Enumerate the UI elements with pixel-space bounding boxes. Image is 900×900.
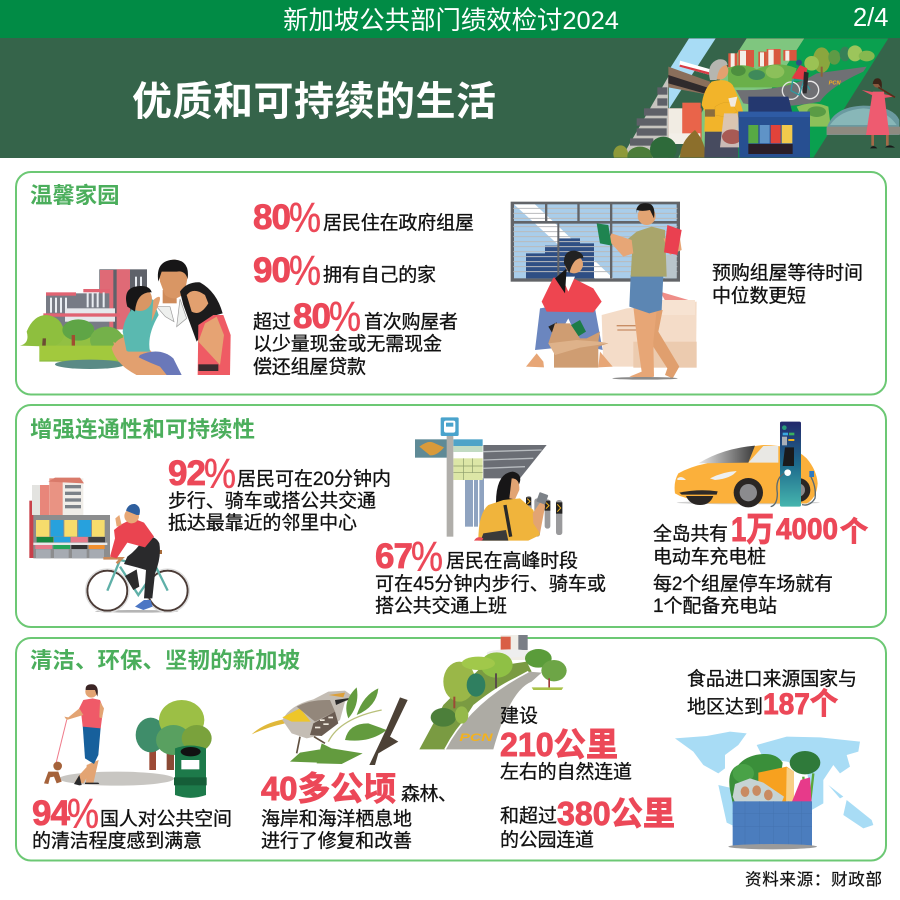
stat: 92% xyxy=(168,450,391,534)
stat: first-time buyers xyxy=(253,293,458,378)
stat: 90% own home: 拥有自己的家 xyxy=(323,264,436,286)
man's legs xyxy=(650,310,679,378)
illustration: world map and groceries xyxy=(675,732,873,849)
heading: 清洁、环保、坚韧的新加坡 xyxy=(30,648,300,673)
stat: 92%: % xyxy=(204,450,236,497)
stat: 210 km nature ways and 380 km park connectors: 380公里 xyxy=(557,795,675,832)
illustration: cyclist xyxy=(29,478,189,613)
stat: 14,000 charging points: 个 xyxy=(840,516,868,547)
stat: 92%: 抵达最靠近的邻里中心 xyxy=(168,512,357,534)
stat: 40 hectares: 海岸和海洋栖息地 xyxy=(261,808,412,830)
stat: 67%: 搭公共交通上班 xyxy=(375,595,507,617)
stat: 94%: % xyxy=(67,790,99,837)
text: waiting time: 预购组屋等待时间 xyxy=(712,262,863,284)
stat: 90% own home: 90 xyxy=(253,251,291,290)
stat: first-time buyers: 首次购屋者 xyxy=(364,311,458,333)
stat: 40 hectares: 森林、 xyxy=(401,783,457,805)
stat: 210 km nature ways and 380 km park connectors: 建设 xyxy=(500,705,538,727)
stat: 90% own home xyxy=(253,247,436,294)
stat: 67%: 可在45分钟内步行、骑车或 xyxy=(375,573,606,595)
illustration: bus stop xyxy=(415,417,562,541)
banner title: 优质和可持续的生活 xyxy=(132,80,496,124)
stat: 92%: 92 xyxy=(168,454,206,493)
banner illustration xyxy=(613,38,900,165)
stat: 80% live in HDB: 80 xyxy=(253,198,291,237)
stat: 94% xyxy=(32,790,232,852)
stat: 210 km nature ways and 380 km park connectors: 左右的自然连道 xyxy=(500,761,632,783)
report title: 新加坡公共部门绩效检讨2024 xyxy=(283,7,619,35)
stat: 14,000 charging points: 1个配备充电站 xyxy=(653,595,777,617)
heading: 温馨家园 xyxy=(30,182,120,208)
stat: 80% live in HDB: % xyxy=(289,194,321,241)
illustration: couple moving in xyxy=(511,202,697,380)
stat: 67%: % xyxy=(411,533,443,580)
heading: 增强连通性和可持续性 xyxy=(30,417,255,442)
stat: 14,000 charging points: 每2个组屋停车场就有 xyxy=(653,573,833,595)
stat: 94%: 国人对公共空间 xyxy=(100,808,232,830)
banner illustration: PCN xyxy=(829,80,842,86)
stat: 14,000 charging points xyxy=(653,511,868,617)
stat: first-time buyers: 超过 xyxy=(253,311,291,333)
stat: first-time buyers: 以少量现金或无需现金 xyxy=(253,333,442,355)
stat: 67%: 67 xyxy=(375,537,413,576)
icon: family and flats xyxy=(20,260,231,375)
stat: first-time buyers: 80 xyxy=(293,297,331,336)
stat: 90% own home: % xyxy=(289,247,321,294)
illustration: bird on branch xyxy=(252,687,408,765)
stat: 14,000 charging points: 全岛共有 xyxy=(653,523,728,545)
stat: 210 km nature ways and 380 km park connectors: 210公里 xyxy=(500,726,618,763)
stat: 67% xyxy=(375,533,606,617)
stat: 210 km nature ways and 380 km park connectors xyxy=(500,705,675,851)
illustration: EV and charger xyxy=(675,422,820,507)
stat: 210 km nature ways and 380 km park connectors: 和超过 xyxy=(500,805,557,827)
stat: first-time buyers: 偿还组屋贷款 xyxy=(253,356,366,378)
stat: 92%: 居民可在20分钟内 xyxy=(237,468,391,490)
banner xyxy=(0,38,900,165)
stat: food import sources: 地区达到 xyxy=(687,696,763,718)
stat: 14,000 charging points: 4000 xyxy=(776,513,838,546)
text: waiting time xyxy=(712,262,863,307)
stat: 67%: 居民在高峰时段 xyxy=(446,550,578,572)
illustration: park connector: PCN xyxy=(459,732,494,744)
page number: 2/4 xyxy=(853,4,888,32)
source note: 资料来源：财政部 xyxy=(745,870,882,889)
stat: 14,000 charging points: 1万 xyxy=(731,511,774,549)
stat: food import sources: 食品进口来源国家与 xyxy=(687,668,857,690)
stat: 210 km nature ways and 380 km park connectors: 的公园连道 xyxy=(500,829,594,851)
stat: 80% live in HDB xyxy=(253,194,474,241)
stat: first-time buyers: % xyxy=(329,293,361,340)
stat: 40 hectares xyxy=(261,770,457,852)
illustration: park connector xyxy=(419,635,567,749)
illustration: woman walking dog xyxy=(44,684,212,798)
stat: food import sources xyxy=(687,668,857,721)
text: waiting time: 中位数更短 xyxy=(712,285,806,307)
stat: 92%: 步行、骑车或搭公共交通 xyxy=(168,490,376,512)
stat: food import sources: 187个 xyxy=(763,688,838,721)
panel: 温馨家园 xyxy=(16,172,886,394)
header bar xyxy=(0,0,900,38)
stat: 94%: 的清洁程度感到满意 xyxy=(32,830,202,852)
stat: 80% live in HDB: 居民住在政府组屋 xyxy=(323,212,474,234)
stat: 40 hectares: 40多公顷 xyxy=(261,770,396,807)
panel: 增强连通性和可持续性 xyxy=(16,405,886,627)
panel: 清洁、环保、坚韧的新加坡 xyxy=(16,635,886,860)
stat: 94%: 94 xyxy=(32,794,71,833)
stat: 40 hectares: 进行了修复和改善 xyxy=(261,830,412,852)
stat: 14,000 charging points: 电动车充电桩 xyxy=(653,546,766,568)
